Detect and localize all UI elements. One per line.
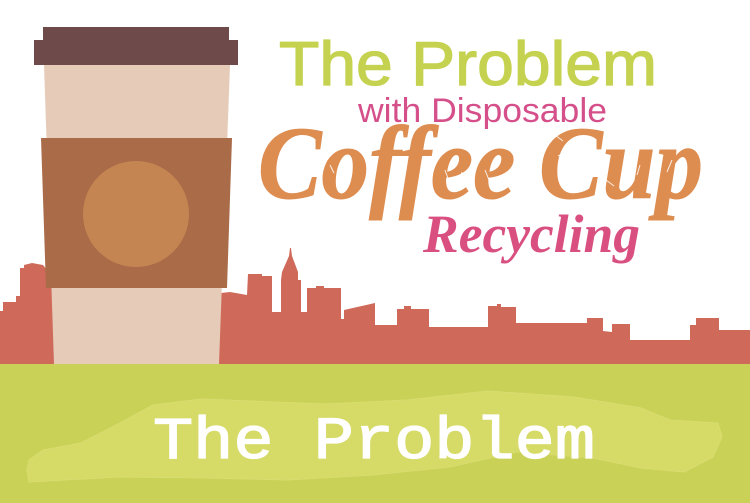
cup sleeve — [41, 138, 232, 288]
cup body — [44, 65, 230, 364]
cup lid — [34, 27, 238, 65]
coffee cup — [34, 27, 238, 364]
torn paper banner — [27, 391, 722, 482]
city skyline — [0, 248, 750, 364]
title: The Problem: The Problem — [279, 30, 657, 99]
title: with Disposable: with Disposable — [357, 92, 607, 130]
green ground band — [0, 364, 750, 503]
title: Recycling: Recycling — [422, 204, 640, 264]
sleeve circle — [83, 161, 189, 267]
banner heading: The Problem — [153, 409, 595, 476]
title: Coffee Cup: Coffee Cup — [258, 106, 703, 221]
